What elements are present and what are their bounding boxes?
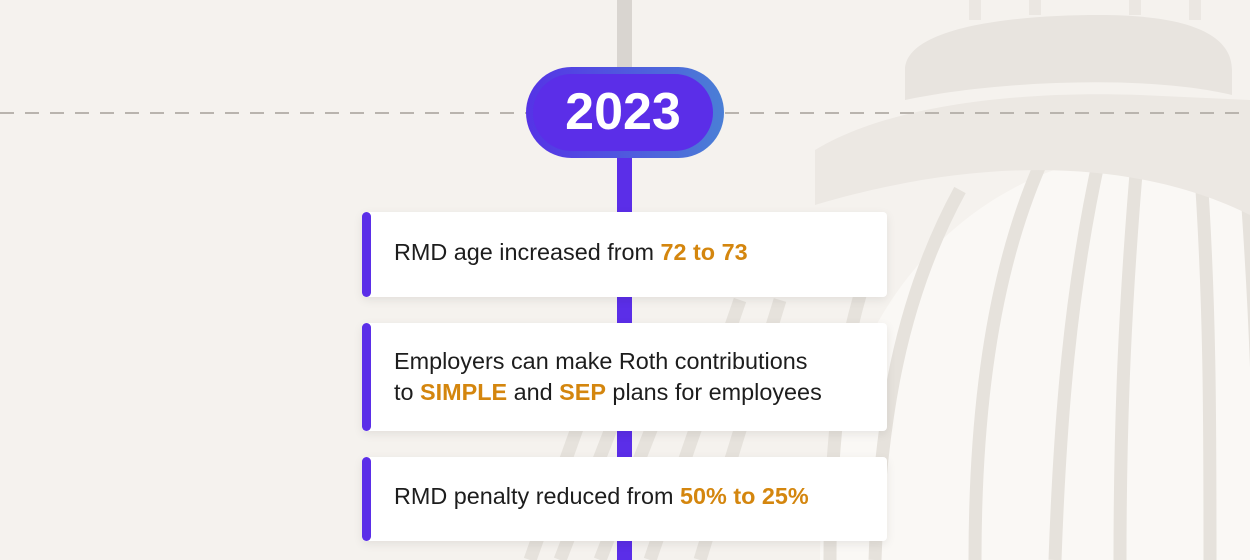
card 2 xyxy=(362,323,887,431)
year pill 2023 xyxy=(526,67,724,158)
card 2 text: Employers can make Roth contributions xyxy=(394,348,807,374)
card 3 xyxy=(362,457,887,541)
year pill 2023: 2023 xyxy=(565,83,681,141)
card 1 text: RMD age increased from 72 to 73 xyxy=(394,239,748,265)
card 1 xyxy=(362,212,887,297)
card 2 text xyxy=(394,348,822,405)
timeline gray top xyxy=(617,0,632,80)
timeline purple xyxy=(617,150,632,560)
card 2 text: to SIMPLE and SEP plans for employees xyxy=(394,379,822,405)
dashed horizontal line xyxy=(0,112,1250,114)
card 3 text: RMD penalty reduced from 50% to 25% xyxy=(394,483,809,509)
